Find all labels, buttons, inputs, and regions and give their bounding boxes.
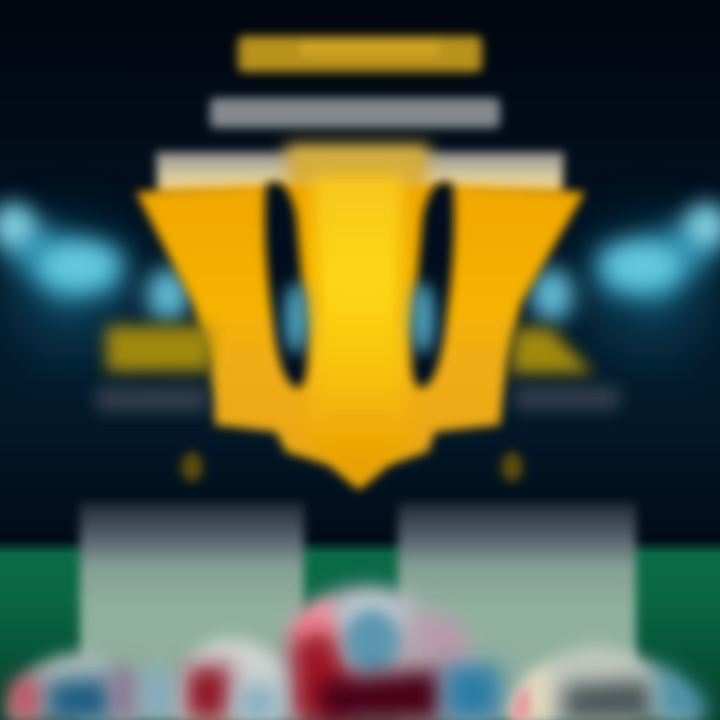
left stat value: [106, 326, 212, 372]
right slit: [411, 182, 454, 388]
right stat: [510, 328, 620, 410]
shield top band: [156, 152, 564, 196]
right stat value: [510, 328, 594, 374]
shield: [136, 144, 585, 490]
left floodlight: [0, 200, 190, 322]
left stat caption: [96, 386, 208, 412]
left-centre ball: [175, 638, 282, 720]
left ball: [8, 652, 172, 720]
centre ball: [280, 590, 505, 720]
shield centre glow: [306, 175, 412, 480]
title: [238, 36, 482, 72]
right stat caption: [514, 386, 620, 410]
shield body: [136, 184, 585, 490]
right panel: [398, 502, 636, 720]
shield top centre: [285, 144, 430, 190]
left stat: [96, 326, 212, 412]
left marker: [181, 452, 203, 482]
right floodlight: [530, 200, 720, 322]
left panel: [80, 502, 304, 720]
left slit: [265, 182, 308, 388]
right ball: [510, 645, 712, 720]
subtitle: [210, 98, 500, 128]
right marker: [501, 452, 523, 482]
